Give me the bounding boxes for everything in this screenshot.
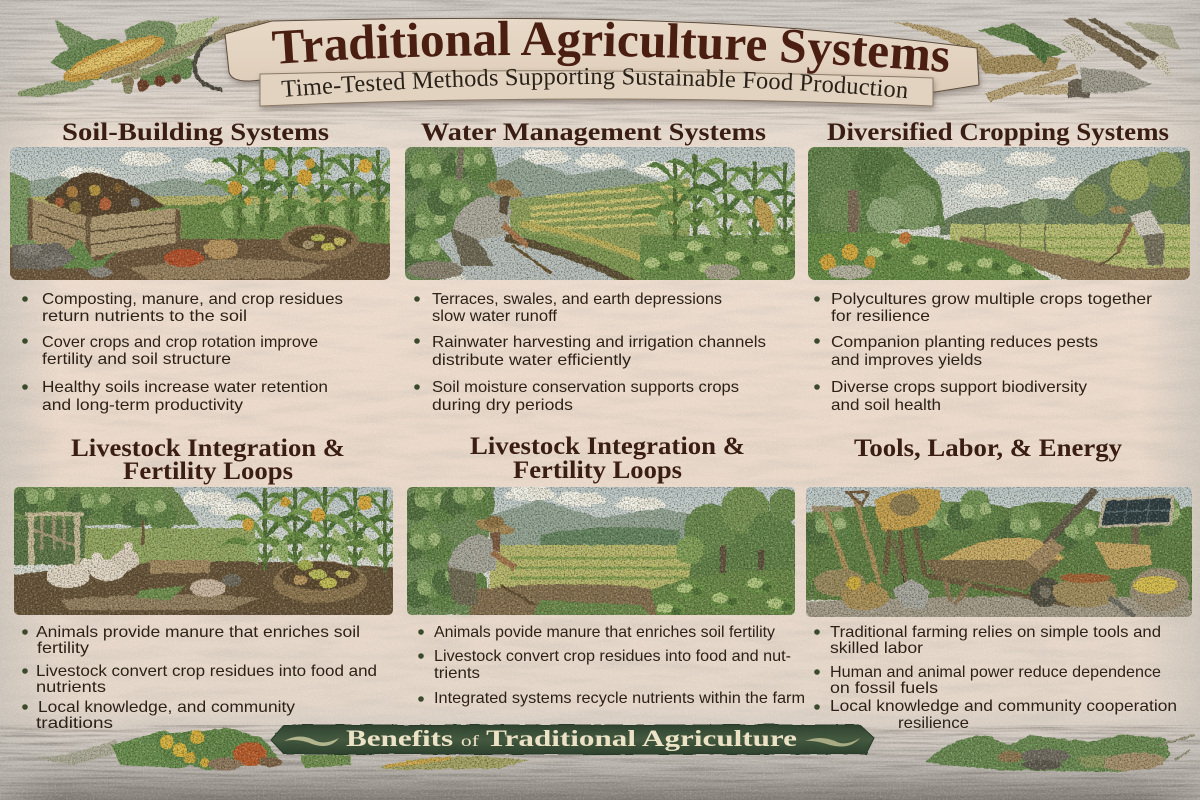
heading: Soil-Building Systems [62, 119, 329, 146]
subtitle: Time-Tested Methods Supporting Sustainable Food Production [281, 68, 908, 98]
bullet list: for resilience [831, 308, 930, 325]
bullet list: Animals provide manure that enriches soil [36, 624, 360, 641]
bullet list: Livestock convert crop residues into food and [36, 663, 377, 680]
decoration: vegetables bottom left [35, 728, 530, 770]
bullet list [22, 291, 343, 414]
bullet list: Rainwater harvesting and irrigation channels [432, 334, 766, 351]
scene: hens, fence and basket [14, 487, 393, 615]
bullet list: resilience [898, 715, 969, 732]
bullet list: return nutrients to the soil [42, 308, 247, 325]
bullet list: Human and animal power reduce dependence [830, 664, 1161, 681]
scene: farmer in irrigation channel [405, 147, 795, 280]
bullet list: distribute water efficiently [432, 352, 631, 369]
heading: Diversified Cropping Systems [827, 119, 1169, 146]
icon: leaf flourish left [284, 736, 339, 746]
bullet list: trients [434, 665, 480, 682]
bullet list [22, 624, 377, 732]
bullet list: and soil health [831, 397, 941, 414]
bullet list: Healthy soils increase water retention [42, 379, 328, 396]
scene: tools, wheelbarrow and solar panel [801, 482, 1197, 622]
bullet list: Livestock convert crop residues into food and nut- [434, 648, 791, 665]
bullet list: Companion planting reduces pests [831, 334, 1098, 351]
banner label: Benefits of Traditional Agriculture [346, 726, 797, 751]
title ribbon banner [222, 17, 984, 113]
scene: compost crate and corn [10, 147, 390, 280]
panel: livestock integration left [14, 438, 393, 728]
heading: Livestock Integration & [71, 435, 345, 462]
banner shape [271, 725, 874, 754]
panel: soil-building systems [10, 122, 390, 414]
scene: polyculture field with farmer [808, 147, 1190, 280]
heading: Tools, Labor, & Energy [854, 435, 1123, 462]
bullet list: slow water runoff [432, 308, 558, 325]
bullet list [418, 624, 805, 707]
bullet list: Diverse crops support biodiversity [831, 379, 1087, 396]
bullet list: Animals povide manure that enriches soil fertility [434, 624, 775, 641]
bullet list: Cover crops and crop rotation improve [42, 334, 318, 351]
bullet list: and improves yields [831, 352, 982, 369]
decoration: foliage and stones bottom right [925, 735, 1195, 772]
title: Traditional Agriculture Systems [272, 20, 948, 74]
decoration: corn and horseshoe top left [18, 16, 272, 96]
bullet list: Terraces, swales, and earth depressions [432, 291, 722, 308]
bullet list: Composting, manure, and crop residues [42, 291, 343, 308]
panel: water management systems [405, 124, 795, 414]
bullet list [814, 291, 1153, 414]
bullet list: Local knowledge, and community [38, 699, 295, 716]
bullet list: Soil moisture conservation supports crops [432, 379, 739, 396]
scene: farmer hoeing field [407, 487, 795, 615]
bullet list: during dry periods [432, 397, 573, 414]
bullet list: on fossil fuels [830, 680, 938, 697]
bullet list: Local knowledge and community cooperation [830, 698, 1177, 715]
icon: leaf flourish right [805, 738, 860, 746]
heading: Livestock Integration & [470, 433, 745, 460]
ribbon: main title [225, 18, 979, 92]
bullet list: skilled labor [830, 640, 924, 657]
bullet list: Polycultures grow multiple crops together [831, 291, 1153, 308]
bullet list [414, 291, 766, 414]
bullet list: Traditional farming relies on simple tools and [830, 624, 1161, 641]
heading second line: Fertility Loops [513, 457, 682, 484]
bullet list [814, 624, 1177, 732]
bullet list: fertility [37, 640, 89, 657]
bullet list: nutrients [36, 679, 106, 696]
bullet list: and long-term productivity [42, 397, 243, 414]
footer banner [271, 725, 874, 754]
panel: tools, labor and energy [801, 435, 1197, 732]
ribbon: subtitle strip [260, 71, 933, 106]
panel: livestock integration center [397, 433, 805, 707]
bullet list: traditions [36, 715, 113, 732]
heading: Water Management Systems [421, 119, 766, 146]
bullet list: fertility and soil structure [42, 351, 231, 368]
panel: diversified cropping systems [800, 119, 1195, 414]
decoration: grain and farm tools top right [893, 17, 1180, 102]
heading second line: Fertility Loops [123, 458, 293, 485]
bullet list: Integrated systems recycle nutrients within the farm [434, 690, 805, 707]
